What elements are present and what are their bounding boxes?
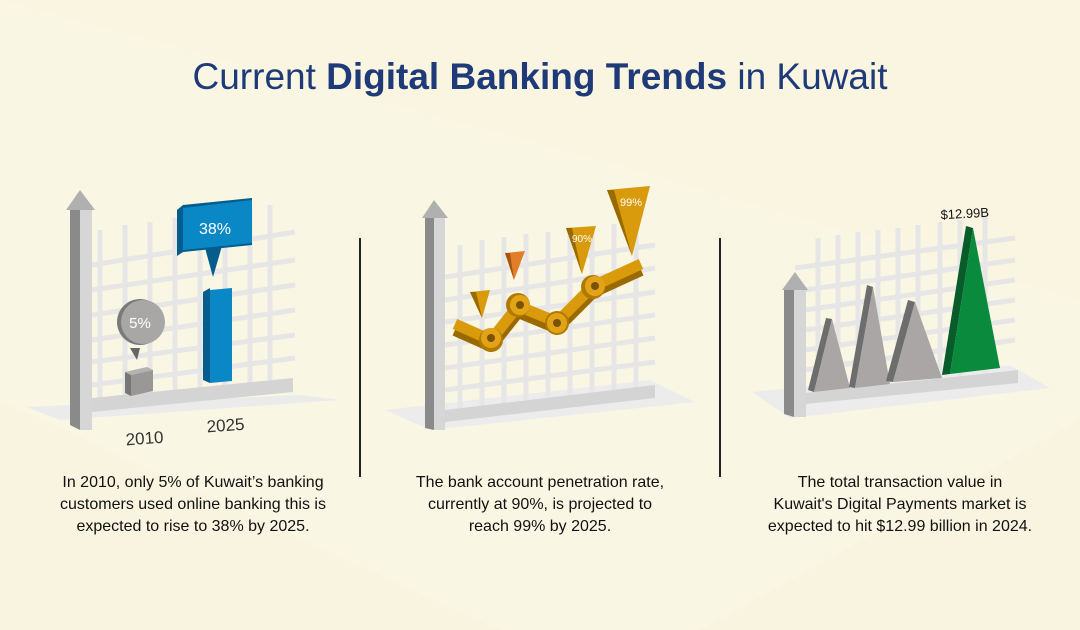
5% bubble [117, 299, 165, 396]
text: panel 2 [416, 474, 664, 535]
text: panel 2: The bank account penetration rate, [416, 474, 664, 491]
chart 1 [27, 190, 340, 449]
text: panel 1 [60, 474, 326, 535]
triangles [808, 205, 1000, 392]
text: panel 1: expected to rise to 38% by 2025. [76, 518, 310, 535]
markers: 99% [620, 197, 642, 209]
38% bar [177, 198, 252, 383]
text: panel 1: customers used online banking this is [60, 496, 326, 513]
text: panel 3: Kuwait's Digital Payments market is [774, 496, 1026, 513]
chart 1: 2025 [206, 415, 245, 436]
38% bar: 38% [199, 221, 231, 238]
5% bubble: 5% [129, 315, 151, 332]
text: panel 3: expected to hit $12.99 billion in 2024. [768, 518, 1032, 535]
text: panel 2: reach 99% by 2025. [469, 518, 611, 535]
text: panel 3 [768, 474, 1032, 535]
markers [470, 186, 650, 318]
title: Current Digital Banking Trends in Kuwait [192, 56, 887, 97]
text: panel 1: In 2010, only 5% of Kuwait’s banking [62, 474, 324, 491]
triangles: $12.99B [940, 205, 989, 222]
line graph [455, 264, 641, 352]
text: panel 3: The total transaction value in [798, 474, 1002, 491]
divider [359, 238, 361, 477]
chart 1: 2010 [125, 428, 164, 449]
chart 3 [752, 205, 1050, 418]
chart 2 [385, 186, 695, 430]
markers: 90% [572, 234, 592, 245]
divider [719, 238, 721, 477]
text: panel 2: currently at 90%, is projected to [428, 496, 652, 513]
